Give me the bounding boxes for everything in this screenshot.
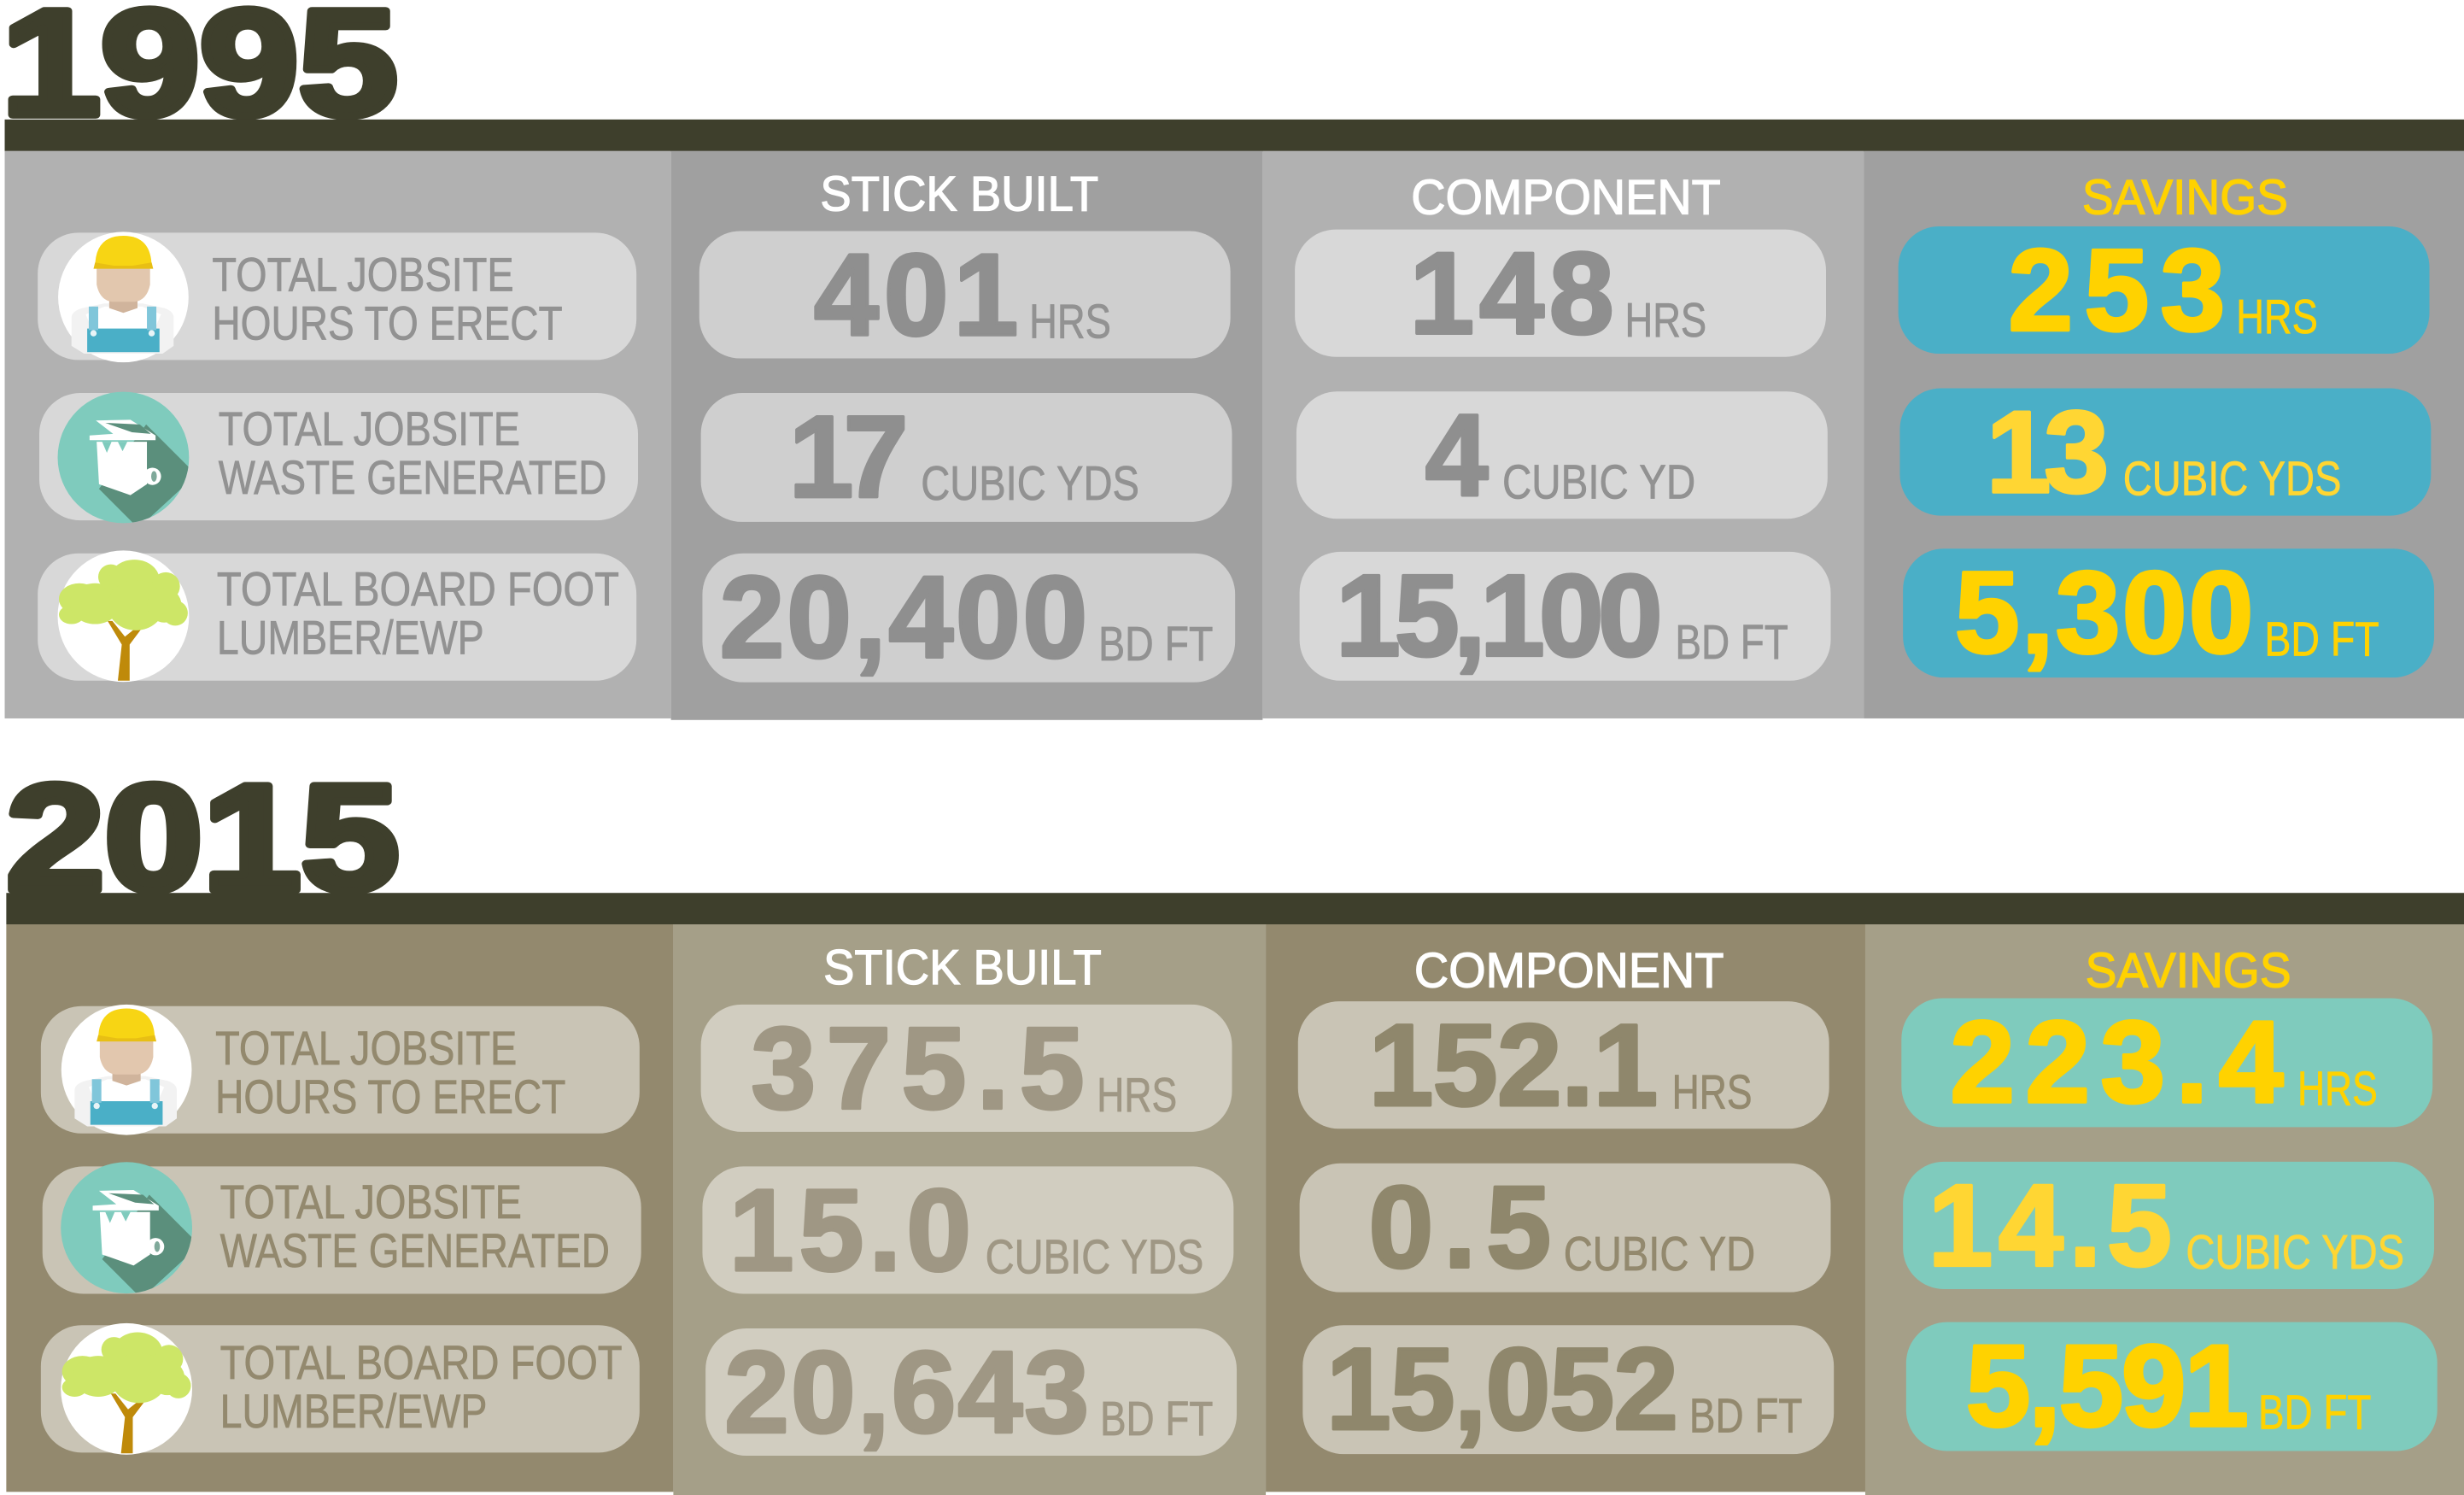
stat: 5,591 bd ft: BD FT (2258, 1386, 2371, 1439)
panel: savings 1995 (1864, 151, 2464, 718)
stat: 15.0 cubic yds (702, 1165, 1233, 1295)
stat: 20,400 bd ft: BD FT (1098, 617, 1213, 671)
label: total board foot lumber/ewp: LUMBER/EWP (217, 612, 484, 665)
stat: 15,100 bd ft (1300, 550, 1831, 681)
stat: 14.5 cubic yds: CUBIC YDS (2186, 1225, 2404, 1279)
section: 1995 comparison (2, 0, 2464, 720)
stat: 152.1 hrs: HRS (1672, 1064, 1753, 1118)
heading: component: COMPONENT (1414, 944, 1724, 999)
panel: row labels 1995 (5, 151, 671, 718)
stat: 15,100 bd ft: 15,100 (1336, 550, 1663, 680)
panel: row labels 2015 (6, 924, 673, 1492)
stat: 375.5 hrs: 375.5 (751, 1003, 1085, 1133)
stat: 152.1 hrs: 152.1 (1369, 1000, 1658, 1130)
stat: 20,400 bd ft: 20,400 (720, 552, 1087, 682)
label: total jobsite waste generated: WASTE GENERATED (220, 1224, 610, 1277)
stat: 253 hrs (1899, 225, 2430, 355)
label: total jobsite hours to erect (212, 248, 563, 349)
stat: 223.4 hrs: 223.4 (1950, 997, 2283, 1127)
heading: savings: SAVINGS (2082, 170, 2288, 225)
heading: stick built: STICK BUILT (823, 941, 1102, 995)
stat: 15,052 bd ft: 15,052 (1326, 1324, 1678, 1454)
stat: 5,591 bd ft: 5,591 (1966, 1321, 2249, 1451)
stat: 17 cubic yds: CUBIC YDS (921, 456, 1139, 510)
stat: 253 hrs: 253 (2008, 225, 2225, 355)
pill: jobsite hours (41, 1005, 640, 1135)
pill: board foot lumber (38, 550, 636, 682)
stat: 5,300 bd ft (1903, 548, 2434, 677)
panel: component 1995 (1262, 151, 1864, 718)
stat: 401 hrs: 401 (814, 230, 1018, 360)
stat: 253 hrs: HRS (2236, 290, 2318, 343)
label: total jobsite hours to erect: TOTAL JOBSITE (212, 248, 514, 301)
heading: component: COMPONENT (1411, 170, 1721, 225)
stat: 17 cubic yds: 17 (789, 391, 908, 521)
stat: 401 hrs: HRS (1029, 295, 1111, 349)
label: total jobsite waste generated (219, 402, 606, 504)
stat: 223.4 hrs: HRS (2297, 1062, 2378, 1116)
label: total jobsite hours to erect (215, 1022, 565, 1123)
stat: 148 hrs: 148 (1409, 228, 1614, 358)
label: total jobsite waste generated: TOTAL JOBSITE (220, 1175, 522, 1228)
pill: jobsite waste (39, 392, 638, 528)
icon: tree (58, 550, 189, 682)
stat: 15,052 bd ft: BD FT (1689, 1388, 1802, 1442)
panel: stick built 2015 (673, 924, 1266, 1495)
header bar 2015 (6, 893, 2464, 924)
stat: 0.5 cubic yd: CUBIC YD (1564, 1227, 1755, 1281)
stat: 375.5 hrs (701, 1003, 1232, 1133)
stat: 20,643 bd ft: 20,643 (724, 1327, 1089, 1457)
stat: 15.0 cubic yds: 15.0 (729, 1165, 971, 1295)
stat: 20,643 bd ft: BD FT (1100, 1392, 1213, 1445)
label: total board foot lumber/ewp: TOTAL BOARD FOOT (220, 1336, 623, 1389)
stat: 13 cubic yds: CUBIC YDS (2123, 452, 2341, 506)
stat: 15.0 cubic yds: CUBIC YDS (986, 1230, 1203, 1284)
stat: 14.5 cubic yds (1903, 1160, 2434, 1290)
pill: jobsite waste (43, 1162, 641, 1299)
label: total jobsite waste generated: WASTE GENERATED (219, 451, 606, 504)
stat: 148 hrs: HRS (1624, 293, 1706, 347)
icon: waste bin (61, 1162, 200, 1299)
stat: 5,300 bd ft: BD FT (2264, 612, 2379, 665)
heading: stick built: STICK BUILT (820, 167, 1098, 222)
label: total jobsite hours to erect: TOTAL JOBSITE (215, 1022, 517, 1075)
icon: waste bin (58, 392, 196, 528)
label: total jobsite waste generated: TOTAL JOBSITE (219, 402, 520, 455)
panel: savings 2015 (1865, 924, 2464, 1495)
stat: 401 hrs (699, 230, 1231, 360)
stat: 4 cubic yd: 4 (1425, 390, 1488, 520)
label: total board foot lumber/ewp: LUMBER/EWP (220, 1385, 487, 1438)
label: total jobsite hours to erect: HOURS TO ERECT (212, 296, 563, 349)
label: total board foot lumber/ewp (220, 1336, 623, 1438)
stat: 148 hrs (1295, 228, 1826, 358)
stat: 4 cubic yd: CUBIC YD (1502, 454, 1695, 508)
title: 2015: 2015 (6, 754, 399, 923)
stat: 223.4 hrs (1901, 997, 2432, 1127)
icon: worker (58, 232, 189, 362)
panel: component 2015 (1266, 924, 1865, 1492)
label: total board foot lumber/ewp: TOTAL BOARD FOOT (217, 562, 619, 615)
stat: 13 cubic yds (1899, 387, 2431, 517)
stat: 0.5 cubic yd (1300, 1162, 1831, 1293)
stat: 152.1 hrs (1298, 1000, 1829, 1130)
header bar 1995 (5, 120, 2464, 152)
stat: 375.5 hrs: HRS (1097, 1068, 1177, 1122)
stat: 20,643 bd ft (705, 1327, 1237, 1457)
stat: 5,300 bd ft: 5,300 (1955, 548, 2253, 677)
stat: 0.5 cubic yd: 0.5 (1369, 1162, 1551, 1292)
stat: 5,591 bd ft (1906, 1321, 2438, 1451)
icon: tree (61, 1323, 192, 1455)
section: 2015 comparison (6, 754, 2464, 1495)
pill: jobsite hours (38, 232, 636, 362)
stat: 4 cubic yd (1296, 390, 1828, 520)
stat: 15,052 bd ft (1302, 1324, 1834, 1454)
stat: 13 cubic yds: 13 (1987, 387, 2109, 517)
icon: worker (61, 1005, 191, 1135)
stat: 15,100 bd ft: BD FT (1675, 615, 1788, 669)
stat: 14.5 cubic yds: 14.5 (1928, 1160, 2172, 1290)
pill: board foot lumber (41, 1323, 640, 1455)
stat: 20,400 bd ft (702, 552, 1235, 683)
label: total jobsite hours to erect: HOURS TO ERECT (215, 1070, 565, 1123)
panel: stick built 1995 (671, 151, 1262, 720)
label: total jobsite waste generated (220, 1175, 610, 1277)
heading: savings: SAVINGS (2086, 944, 2291, 999)
label: total board foot lumber/ewp (217, 562, 619, 665)
stat: 17 cubic yds (701, 391, 1232, 522)
